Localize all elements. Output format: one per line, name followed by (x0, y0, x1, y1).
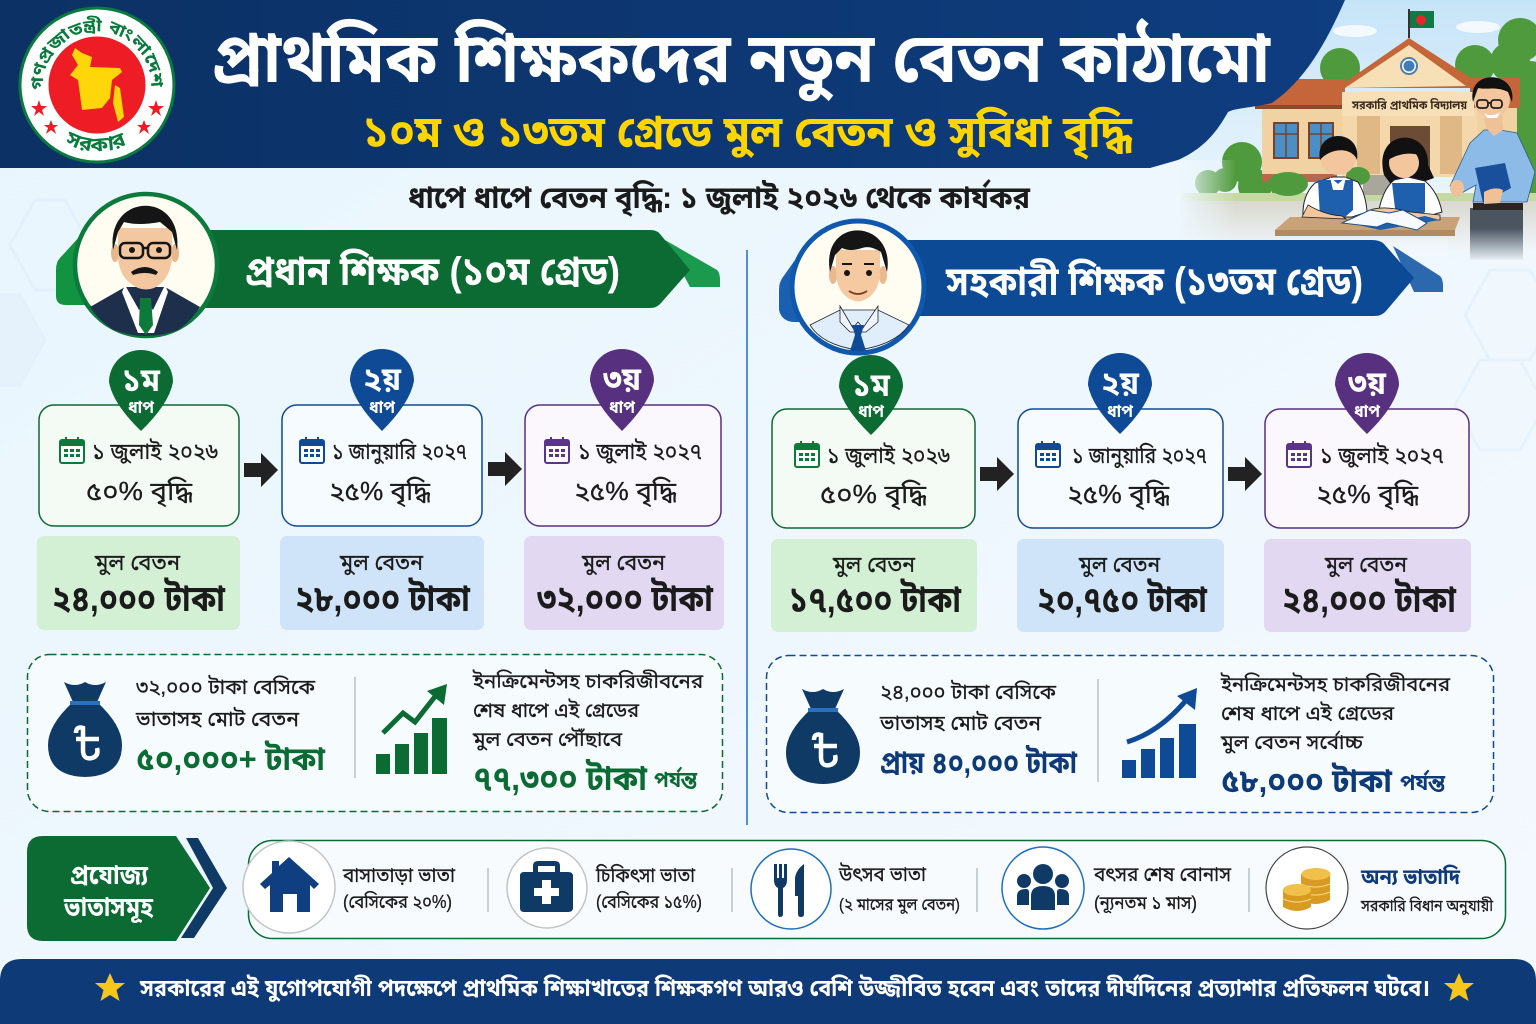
building (1255, 38, 1520, 196)
avatar: assistant teacher (792, 221, 924, 353)
left stage 2 salary: ২৮,০০০ টাকা (295, 578, 471, 619)
icon: calendar (1036, 441, 1060, 467)
icon: star (1444, 973, 1474, 1001)
panel: assistant teacher total pay: ইনক্রিমেন্টসহ চাকরিজীবনের (1220, 672, 1451, 696)
arrow (1228, 457, 1262, 491)
panel: headmaster total pay: ৫০,০০০+ টাকা (136, 741, 326, 777)
panel: assistant teacher total pay: ২৪,০০০ টাকা বেসিকে (880, 680, 1057, 704)
icon: calendar (545, 437, 569, 463)
left stage 2 pin (350, 349, 414, 431)
left stage 3 card (525, 405, 721, 526)
icon: rising chart (376, 684, 447, 774)
right stage 3 card: ১ জুলাই ২০২৭ (1320, 443, 1444, 468)
footer band: সরকারের এই যুগোপযোগী পদক্ষেপে প্রাথমিক শিক্ষাখাতের শিক্ষকগণ আরও বেশি উজ্জীবিত হবেন এবং তাদের দীর্ঘদিনের প্রত্যাশার প্রতিফলন ঘটবে। (139, 974, 1430, 1002)
right stage 2 card: ২৫% বৃদ্ধি (1067, 479, 1170, 510)
right stage 1 pin: ১ম (852, 367, 891, 403)
other allowances: সরকারি বিধান অনুযায়ী (1360, 896, 1494, 915)
girl student (1370, 138, 1442, 220)
year-end bonus (1002, 847, 1232, 929)
panel: headmaster total pay: মুল বেতন পৌঁছাবে (472, 727, 623, 751)
right stage 1 pin: ধাপ (858, 402, 884, 421)
right stage 1 salary (771, 539, 977, 632)
icon: calendar (300, 437, 324, 463)
left stage 2 card (282, 405, 482, 526)
emblem: সরকার (66, 132, 126, 152)
right stage 2 card: ১ জানুয়ারি ২০২৭ (1072, 443, 1207, 469)
left stage 2 salary (280, 536, 484, 630)
title: প্রাথমিক শিক্ষকদের নতুন বেতন কাঠামো (212, 17, 1271, 101)
left stage 1 salary: ২৪,০০০ টাকা (52, 578, 226, 619)
left stage 3 pin: ৩য় (603, 361, 642, 397)
arrow (980, 457, 1014, 491)
divider between grades (746, 250, 748, 825)
icon: calendar (60, 437, 84, 463)
left stage 1 pin (109, 350, 173, 431)
allowances label: ভাতাসমূহ (63, 892, 154, 924)
panel: assistant teacher total pay: ভাতাসহ মোট বেতন (879, 711, 1041, 735)
medical allowance: (বেসিকের ১৫%) (596, 892, 702, 912)
right stage 3 pin: ধাপ (1354, 402, 1380, 421)
left stage 3 salary: ৩২,০০০ টাকা (537, 578, 714, 619)
right stage 3 pin (1335, 353, 1399, 434)
right stage 2 pin (1088, 353, 1152, 434)
book (1342, 210, 1440, 230)
subtitle: ১০ম ও ১৩তম গ্রেডে মুল বেতন ও সুবিধা বৃদ্ধি (363, 107, 1133, 160)
teacher (1450, 77, 1535, 262)
panel: headmaster total pay (28, 654, 722, 812)
panel: headmaster total pay: ৩২,০০০ টাকা বেসিকে (136, 675, 316, 699)
panel: headmaster total pay: ইনক্রিমেন্টসহ চাকরিজীবনের (472, 669, 704, 693)
icon: medical kit (520, 861, 573, 912)
left stage 1 salary: মুল বেতন (94, 550, 181, 576)
icon: money bag (48, 682, 122, 777)
building: সরকারি প্রাথমিক বিদ্যালয় (1351, 97, 1468, 112)
left stage 3 card: ২৫% বৃদ্ধি (574, 476, 677, 507)
ground (1180, 193, 1536, 203)
left stage 3 pin (590, 349, 654, 431)
panel: allowances (243, 840, 1506, 938)
medical allowance (507, 848, 702, 928)
panel: headmaster total pay: শেষ ধাপে এই গ্রেডের (473, 698, 640, 722)
right stage 1 card (772, 409, 975, 528)
footer band (0, 959, 1536, 1024)
left stage 3 salary: মুল বেতন (581, 550, 666, 576)
right stage 3 salary: মুল বেতন (1324, 552, 1408, 578)
icon: calendar (1287, 441, 1311, 467)
panel: headmaster total pay: ৭৭,৩০০ টাকা (473, 758, 647, 798)
right stage 1 salary: ১৭,৫০০ টাকা (789, 579, 962, 620)
year-end bonus: (ন্যূনতম ১ মাস) (1094, 893, 1197, 914)
panel: headmaster total pay: ভাতাসহ মোট বেতন (135, 707, 299, 731)
boy student (1302, 136, 1367, 219)
icon: rising chart (1122, 688, 1197, 778)
right stage 3 salary: ২৪,০০০ টাকা (1282, 579, 1457, 620)
panel: headmaster banner (56, 230, 720, 308)
right stage 2 pin: ২য় (1101, 365, 1140, 401)
left stage 1 salary (37, 536, 240, 630)
header band (0, 0, 1345, 168)
flag (1409, 9, 1434, 38)
house allowance: বাসাতাড়া ভাতা (342, 865, 456, 887)
panel: assistant teacher total pay: পর্যন্ত (1400, 769, 1445, 795)
right stage 2 card (1018, 409, 1223, 528)
left stage 1 pin: ধাপ (128, 398, 154, 417)
left stage 2 card: ২৫% বৃদ্ধি (329, 476, 431, 507)
right stage 1 salary: মুল বেতন (832, 552, 916, 578)
left stage 2 pin: ধাপ (369, 398, 395, 417)
panel: assistant teacher total pay: মুল বেতন সর্বোচ্চ (1220, 729, 1363, 754)
festival allowance: উৎসব ভাতা (838, 862, 927, 886)
emblem: গণপ্রজাতন্ত্রী বাংলাদেশ (31, 16, 164, 90)
right stage 3 salary (1264, 539, 1471, 632)
desk (1275, 217, 1460, 256)
arrow (488, 452, 522, 486)
icon: fork and knife (774, 864, 804, 917)
allowances label: প্রযোজ্য (70, 860, 148, 890)
house allowance: (বেসিকের ২০%) (343, 892, 452, 912)
other allowances: অন্য ভাতাদি (1360, 865, 1461, 889)
house allowance (243, 841, 456, 933)
right stage 2 salary: ২০,৭৫০ টাকা (1037, 579, 1208, 620)
icon: calendar (795, 441, 819, 467)
left stage 3 pin: ধাপ (609, 398, 635, 417)
right stage 1 pin (839, 355, 903, 435)
right stage 1 card: ১ জুলাই ২০২৬ (827, 443, 950, 468)
left stage 1 pin: ১ম (122, 362, 161, 398)
festival allowance: (২ মাসের মুল বেতন) (839, 895, 960, 915)
other allowances (1266, 847, 1494, 929)
right stage 3 card (1265, 409, 1469, 528)
heading: headmaster: প্রধান শিক্ষক (১০ম গ্রেড) (245, 249, 620, 294)
right stage 2 salary: মুল বেতন (1078, 552, 1161, 578)
left stage 1 card (39, 405, 239, 526)
icon: people (1017, 864, 1069, 910)
right stage 2 salary (1017, 539, 1224, 632)
emblem (18, 6, 176, 164)
panel: assistant teacher total pay: শেষ ধাপে এই গ্রেডের (1221, 701, 1395, 725)
trees (1195, 18, 1536, 205)
right stage 1 card: ৫০% বৃদ্ধি (820, 479, 927, 510)
medical allowance: চিকিৎসা ভাতা (595, 863, 696, 887)
panel: assistant teacher total pay: ৫৮,০০০ টাকা (1221, 763, 1393, 799)
icon: coins (1283, 868, 1330, 911)
icon: money bag (786, 689, 860, 784)
effective date line: ধাপে ধাপে বেতন বৃদ্ধি: ১ জুলাই ২০২৬ থেকে কার্যকর (408, 178, 1030, 217)
festival allowance (751, 849, 960, 929)
avatar: headmaster (75, 194, 217, 336)
allowances label (27, 836, 227, 941)
panel: headmaster total pay: পর্যন্ত (654, 766, 697, 792)
school illustration (1176, 0, 1536, 262)
left stage 3 salary (524, 536, 724, 630)
right stage 2 pin: ধাপ (1107, 402, 1133, 421)
panel: assistant teacher total pay (766, 656, 1494, 812)
arrow (244, 453, 278, 487)
left stage 2 card: ১ জানুয়ারি ২০২৭ (332, 439, 467, 465)
panel: assistant teacher banner (779, 240, 1443, 322)
left stage 3 card: ১ জুলাই ২০২৭ (578, 439, 702, 464)
right stage 3 card: ২৫% বৃদ্ধি (1316, 479, 1419, 510)
icon: star (95, 973, 125, 1001)
icon: house (260, 857, 319, 912)
left stage 2 pin: ২য় (363, 361, 402, 397)
left stage 2 salary: মুল বেতন (339, 550, 424, 576)
panel: assistant teacher total pay: প্রায় ৪০,০০০ টাকা (880, 744, 1078, 780)
left stage 1 card: ৫০% বৃদ্ধি (86, 476, 193, 507)
left stage 1 card: ১ জুলাই ২০২৬ (92, 439, 218, 464)
heading: assistant teacher: সহকারী শিক্ষক (১৩তম গ্রেড) (945, 259, 1363, 304)
year-end bonus: বৎসর শেষ বোনাস (1093, 864, 1232, 886)
right stage 3 pin: ৩য় (1348, 365, 1387, 401)
